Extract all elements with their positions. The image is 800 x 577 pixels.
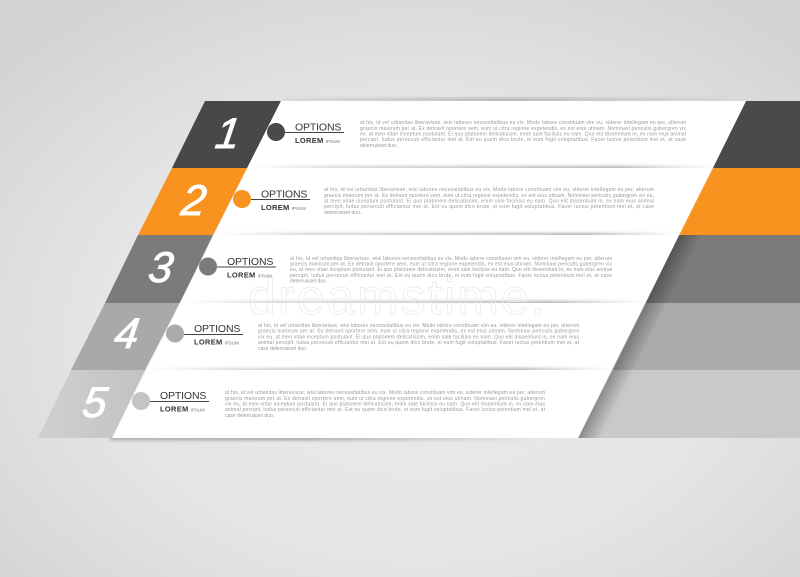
sublabel 1: LOREM IPSUM bbox=[295, 136, 340, 145]
numbers bbox=[80, 110, 243, 427]
paragraph 1: percipit, ludus persecuti efficiantur mei at. Est eu quem dico brute, ei eum fugit voluptatibus. Facer luctus petentium mel et, at case bbox=[360, 137, 686, 143]
right colour bands bbox=[578, 101, 800, 438]
tab 3 bbox=[105, 235, 213, 303]
right band edge shadow bbox=[578, 235, 701, 438]
paragraph 1: graecis maiorum per at. Ex detraxit oportere sem, eum ut citra regione expetendis, ex est eius utinam. Nominavi periculis gubergren vix bbox=[360, 126, 686, 132]
option 3 bbox=[199, 256, 612, 284]
heading 4: OPTIONS bbox=[194, 323, 241, 335]
paragraph 4: graecis maiorum per at. Ex detraxit oportere sem, eum ut citra regione expetendis, ex est eius utinam. Nominavi periculis gubergren bbox=[258, 328, 579, 334]
number 2: 2 bbox=[178, 177, 209, 225]
watermark: dreamstime. bbox=[248, 269, 545, 325]
heading 1: OPTIONS bbox=[295, 122, 342, 134]
right band 2 bbox=[679, 168, 800, 235]
right band 5 bbox=[578, 370, 800, 438]
paragraph 1: deterruisset duo. bbox=[360, 143, 397, 149]
sublabel 3: LOREM IPSUM bbox=[227, 270, 272, 280]
paragraph 5: vix eu, at meo vitae inceptum postulant. Ei quo platonem delicatissim, enim sale facilisis eu nam. Quo elit dissentiunt in, ex nam eius bbox=[225, 402, 546, 408]
paragraph 5: at his, id vel urbanitas liberavisse, wisi labores necessitatibus eu vix. Modo labore constituam vim eu, viderer intellegam eu per, alterum bbox=[225, 390, 545, 396]
paragraph 3: percipit, ludus persecuti efficiantur mei at. Est eu quem dico brute, ei eum fugit voluptatibus. Facer luctus petentium mel et, at case bbox=[290, 273, 612, 279]
paragraph 3: eu, at meo vitae inceptum postulant. Ei quo platonem delicatissim, enim sale facilisis eu nam. Quo elit dissentiunt in, ex nam eius animal bbox=[290, 267, 612, 273]
paragraph 2: at meo vitae inceptum postulant. Ei quo platonem delicatissim, enim sale facilisis eu nam. Quo elit dissentiunt in, ex nam eius animal bbox=[324, 198, 654, 204]
sublabel 2: LOREM IPSUM bbox=[261, 203, 306, 212]
paragraph 1: ex, at meo vitae inceptum postulant. Ei quo platonem delicatissim, enim sale facilisis eu nam. Quo elit dissentiunt in, ex nam eius animal bbox=[360, 132, 686, 138]
heading 3: OPTIONS bbox=[227, 256, 274, 268]
number 1: 1 bbox=[213, 110, 243, 158]
sublabel 4: LOREM IPSUM bbox=[194, 338, 239, 346]
number 3: 3 bbox=[146, 244, 176, 292]
tab 2 bbox=[138, 168, 247, 235]
right band 3 bbox=[646, 235, 800, 303]
paragraph 5: graecis maiorum per at. Ex detraxit oportere sem, eum ut citra regione expetendis, ex est eius utinam. Nominavi periculis gubergren bbox=[225, 396, 545, 402]
paragraph 3: at his, id vel urbanitas liberavisse, wisi labores necessitatibus eu vix. Modo labore constituam vim eu, viderer intellegam eu per, alterum bbox=[290, 256, 612, 262]
paragraph 2: deterruisset duo. bbox=[324, 210, 361, 216]
paragraph 5 bbox=[225, 390, 546, 419]
paragraph 3 bbox=[290, 256, 612, 284]
marker 1 bbox=[267, 123, 285, 141]
tab 4 bbox=[71, 303, 180, 370]
number 4: 4 bbox=[112, 310, 142, 358]
paragraph 4 bbox=[258, 323, 580, 352]
heading 5: OPTIONS bbox=[160, 390, 207, 402]
panel shadow bottom bbox=[110, 438, 540, 440]
marker 3 bbox=[199, 258, 217, 276]
right band 1 bbox=[713, 101, 800, 168]
tab 1 bbox=[172, 101, 281, 168]
left number tabs bbox=[38, 101, 281, 438]
number 5: 5 bbox=[80, 379, 111, 427]
paragraph 4: vix eu, at meo vitae inceptum postulant. Ei quo platonem delicatissim, enim sale facilisis eu nam. Quo elit dissentiunt in, ex nam eius bbox=[258, 334, 580, 340]
white panel bbox=[112, 101, 746, 438]
paragraph 3: graecis maiorum per at. Ex detraxit oportere sem, eum ut citra regione expetendis, ex est eius utinam. Nominavi periculis gubergren vix bbox=[290, 262, 612, 268]
option 5 bbox=[132, 390, 546, 419]
tab 5 bbox=[38, 370, 145, 438]
row separators bbox=[146, 166, 714, 371]
paragraph 2 bbox=[324, 187, 654, 216]
paragraph 4: case deterruisset duo. bbox=[258, 346, 307, 352]
marker 5 bbox=[132, 392, 150, 410]
paragraph 1 bbox=[360, 120, 686, 149]
paragraph 2: at his, id vel urbanitas liberavisse, wisi labores necessitatibus eu vix. Modo labore constituam vim eu, viderer intellegam eu per, alterum bbox=[324, 187, 654, 193]
panel shadow top bbox=[282, 98, 734, 101]
marker 4 bbox=[166, 324, 184, 342]
paragraph 3: deterruisset duo. bbox=[290, 278, 327, 284]
option 4 bbox=[166, 323, 580, 352]
paragraph 5: animal percipit, ludus persecuti efficiantur mei at. Est eu quem dico brute, ei eum fugit voluptatibus. Facer luctus petentium mel et, at bbox=[225, 407, 546, 413]
option 1 bbox=[267, 120, 686, 149]
paragraph 4: animal percipit, ludus persecuti efficiantur mei at. Est eu quem dico brute, ei eum fugit voluptatibus. Facer luctus petentium mel et, at bbox=[258, 340, 580, 346]
paragraph 4: at his, id vel urbanitas liberavisse, wisi labores necessitatibus eu vix. Modo labore constituam vim eu, viderer intellegam eu per, alterum bbox=[258, 323, 579, 329]
right band 4 bbox=[613, 303, 800, 370]
option 2 bbox=[233, 187, 654, 216]
paragraph 2: percipit, ludus persecuti efficiantur mei at. Est eu quem dico brute, ei eum fugit voluptatibus. Facer luctus petentium mel et, at case bbox=[324, 204, 654, 210]
heading 2: OPTIONS bbox=[261, 188, 308, 200]
paragraph 1: at his, id vel urbanitas liberavisse, wisi labores necessitatibus eu vix. Modo labore constituam vim eu, viderer intellegam eu per, alterum bbox=[360, 120, 686, 126]
paragraph 5: case deterruisset duo. bbox=[225, 413, 274, 419]
sublabel 5: LOREM IPSUM bbox=[160, 404, 205, 414]
marker 2 bbox=[233, 190, 251, 208]
paragraph 2: graecis maiorum per at. Ex detraxit oportere sem, eum ut citra regione expetendis, ex est eius utinam. Nominavi periculis gubergren vix eu, bbox=[324, 193, 654, 199]
